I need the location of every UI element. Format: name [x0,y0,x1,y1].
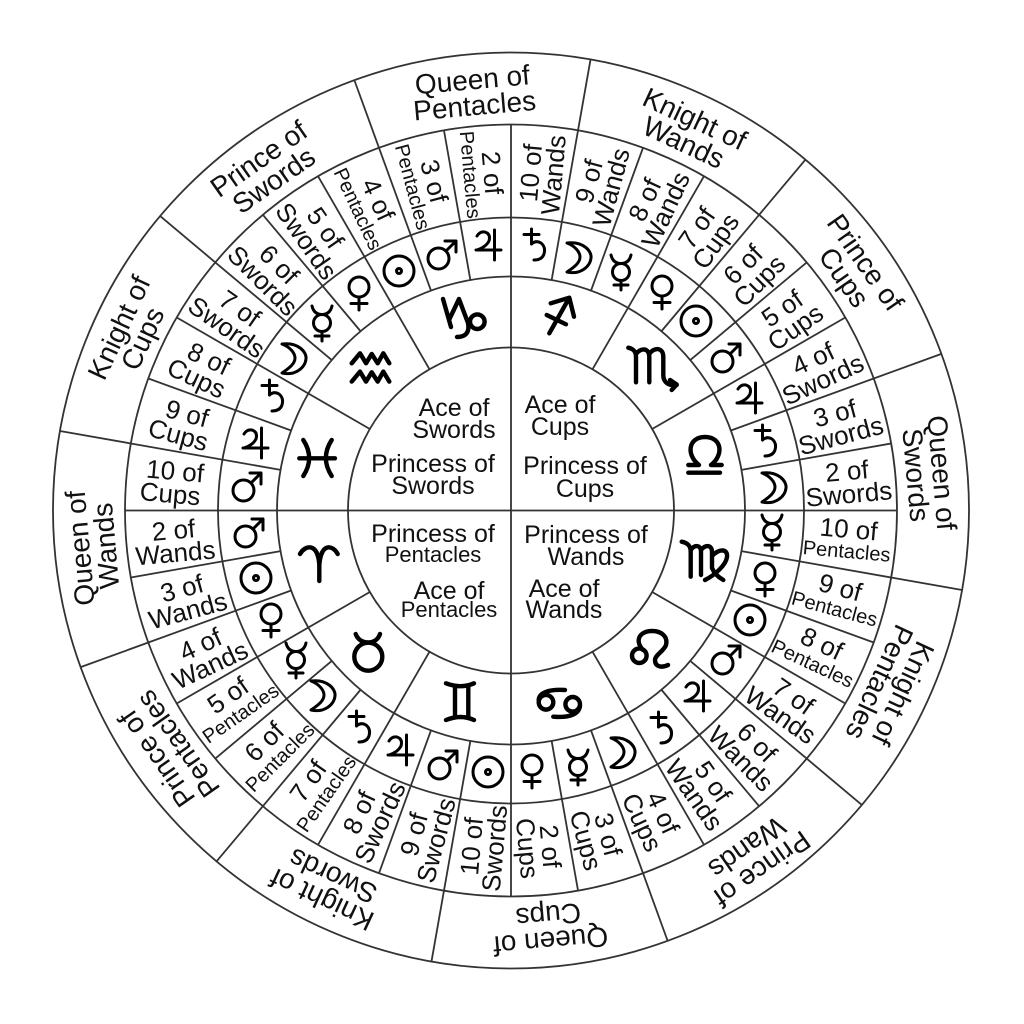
label: 10 of Cups: 10 of [145,454,206,489]
label: 7 of Wands: 7 of [767,671,821,721]
label: Ace of Pentacles: Pentacles [401,597,497,622]
label: 8 of Swords: Swords [348,777,412,868]
label: 7 of Wands: Wands [739,680,822,750]
label: 9 of Pentacles: Pentacles [789,588,880,632]
label: 6 of Swords: Swords [222,239,304,322]
center circle: aces and princesses [371,391,648,624]
label: Ace of Cups: Cups [531,413,589,441]
label: Prince of Wands: Wands [703,810,791,885]
label: Princess of Cups: Princess of [523,452,647,480]
label: Princess of Cups: Cups [556,475,614,503]
label: 3 of Cups: Cups [564,807,608,874]
label: 7 of Pentacles: 7 of [283,754,333,807]
label: 6 of Pentacles: Pentacles [242,719,319,797]
icon: Sagittarius [547,298,574,333]
icon: Saturn [524,229,545,260]
label: 4 of Swords: Swords [777,348,868,411]
icon: Venus [755,563,775,596]
label: Knight of Pentacles: Knight of [865,637,940,750]
icon: Moon [611,738,635,768]
icon: Sun [473,757,503,787]
label: 4 of Cups: 4 of [640,787,686,839]
label: 5 of Swords: 5 of [301,202,350,255]
label: Prince of Pentacles: Prince of [112,704,201,813]
label: 4 of Pentacles: Pentacles [329,165,386,254]
icon: Pisces [299,440,335,476]
label: 3 of Swords: Swords [795,410,887,461]
label: Prince of Cups: Cups [813,242,875,313]
icon: Mars [712,344,740,372]
label: 2 of Cups: 2 of [534,823,567,870]
icon: Sun [735,605,765,635]
icon: Sun [384,256,414,286]
label: 9 of Cups: 9 of [162,393,213,434]
icon: Moon [311,681,335,711]
label: Knight of Cups: Cups [115,303,170,375]
label: 4 of Pentacles: 4 of [355,174,401,226]
label: Knight of Swords: Swords [284,842,382,910]
label: 2 of Wands: Wands [134,534,217,571]
label: Princess of Pentacles: Pentacles [385,542,481,567]
label: 5 of Cups: Cups [762,298,829,357]
label: 5 of Pentacles: 5 of [201,670,255,720]
label: Queen of Wands: Queen of [60,489,101,607]
label: 2 of Swords: 2 of [824,454,871,488]
icon: Mars [233,473,261,501]
icon: Sun [681,306,711,336]
label: Knight of Wands: Wands [638,110,729,175]
icon: Mercury [568,750,588,785]
icon: Mercury [611,255,631,290]
label: 3 of Pentacles: 3 of [414,156,454,207]
label: 5 of Pentacles: Pentacles [199,680,283,748]
icon: Taurus [354,634,382,671]
label: 4 of Wands: Wands [168,635,253,696]
icon: Mars [235,519,263,547]
label: 6 of Cups: Cups [727,249,791,313]
label: 2 of Swords: Swords [804,475,893,513]
icon: Saturn [651,712,672,743]
icon: Leo [632,631,668,667]
label: Prince of Wands: Prince of [708,824,816,913]
label: Ace of Swords: Ace of [419,394,489,422]
label: 2 of Pentacles: 2 of [476,150,509,197]
planet ring: planetary symbols [233,229,786,788]
icon: Mars [429,751,457,779]
icon: Mercury [762,515,782,550]
label: Queen of Cups: Queen of [492,921,609,962]
label: 5 of Wands: 5 of [688,755,738,809]
label: 2 of Cups: Cups [510,817,545,880]
label: Knight of Pentacles: Pentacles [839,620,919,745]
label: 7 of Swords: 7 of [213,284,267,334]
label: 9 of Wands: 9 of [569,156,609,206]
icon: Mercury [312,306,332,341]
icon: Mars [428,241,456,269]
label: 10 of Wands: Wands [535,134,572,216]
icon: Moon [282,344,306,374]
label: Princess of Pentacles: Princess of [371,520,495,548]
icon: Cancer [539,690,580,717]
label: Queen of Swords: Swords [896,427,935,523]
label: Queen of Swords: Queen of [921,414,962,532]
label: 7 of Swords: Swords [183,290,271,364]
label: Ace of Wands: Wands [526,596,602,624]
icon: Venus [652,276,672,309]
label: 5 of Wands: Wands [659,753,729,836]
outer ring: court cards [60,59,962,962]
icon: Mars [712,646,740,674]
label: 7 of Cups: 7 of [672,201,722,254]
icon: Gemini [446,683,474,720]
label: 6 of Swords: 6 of [253,238,306,291]
label: 6 of Wands: 6 of [731,716,784,769]
label: 2 of Pentacles: Pentacles [455,130,484,220]
decan ring: minor arcana numbered cards [132,128,894,893]
label: 8 of Cups: Cups [163,352,230,405]
label: 3 of Wands: Wands [145,586,230,635]
icon: Libra [688,437,722,473]
label: Prince of Swords: Prince of [205,115,313,203]
label: 8 of Pentacles: Pentacles [768,636,857,693]
label: 3 of Swords: 3 of [810,393,860,433]
icon: Moon [762,473,786,503]
icon: Saturn [755,425,776,456]
label: Knight of Wands: Knight of [638,82,752,156]
label: 2 of Wands: 2 of [151,513,197,547]
label: Queen of Wands: Wands [87,502,125,590]
label: 9 of Swords: 9 of [394,809,434,859]
label: Queen of Pentacles: Queen of [414,59,531,100]
label: 10 of Cups: Cups [139,476,202,511]
icon: Venus [261,604,281,637]
label: Prince of Swords: Swords [227,141,321,220]
label: 8 of Pentacles: 8 of [796,621,849,666]
label: 8 of Cups: 8 of [183,336,236,382]
label: 10 of Wands: 10 of [513,142,548,203]
icon: Jupiter [737,383,762,413]
zodiac ring: zodiac signs [299,298,727,720]
label: 8 of Wands: Wands [635,167,696,252]
icon: Jupiter [685,681,710,711]
icon: Capricorn [443,299,485,337]
label: 6 of Pentacles: 6 of [238,715,291,768]
label: 8 of Wands: 8 of [622,173,668,226]
label: Ace of Pentacles: Ace of [414,577,484,605]
label: 5 of Cups: 5 of [756,283,809,333]
label: Princess of Wands: Wands [548,543,624,571]
icon: Aquarius [352,353,389,382]
label: 7 of Pentacles: Pentacles [293,752,361,837]
label: Princess of Swords: Swords [391,472,475,500]
label: 5 of Swords: Swords [269,197,344,285]
label: 6 of Cups: 6 of [717,238,769,290]
label: Knight of Cups: Knight of [82,271,157,384]
icon: Moon [567,243,591,273]
label: Ace of Wands: Ace of [529,575,599,603]
label: 10 of Pentacles: Pentacles [802,537,891,567]
label: 4 of Wands: 4 of [174,621,227,667]
icon: Jupiter [476,230,501,260]
icon: Saturn [349,711,370,742]
icon: Jupiter [388,735,413,765]
icon: Saturn [262,380,283,411]
label: 3 of Cups: 3 of [588,810,628,860]
icon: Jupiter [243,428,268,458]
label: 4 of Cups: Cups [616,788,668,856]
label: Queen of Cups: Cups [515,897,582,934]
label: 9 of Swords: Swords [410,795,462,886]
label: 4 of Swords: 4 of [787,336,840,381]
label: Queen of Pentacles: Pentacles [412,85,537,126]
label: Princess of Swords: Princess of [371,450,495,478]
label: 7 of Cups: Cups [686,208,745,275]
label: 9 of Wands: Wands [586,145,636,230]
label: 9 of Pentacles: 9 of [815,567,866,608]
label: 10 of Swords: Swords [476,804,513,893]
label: Ace of Swords: Swords [412,416,496,444]
icon: Virgo [682,542,727,580]
label: 10 of Swords: 10 of [454,815,489,876]
icon: Aries [300,547,338,581]
label: 8 of Swords: 8 of [336,786,382,839]
label: Prince of Pentacles: Pentacles [130,684,226,803]
label: 3 of Wands: 3 of [157,568,208,608]
icon: Mercury [286,643,306,678]
label: Ace of Cups: Ace of [525,391,595,419]
label: 9 of Cups: Cups [145,412,211,457]
icon: Scorpio [628,348,677,390]
icon: Sun [241,563,271,593]
label: Knight of Swords: Knight of [265,862,379,937]
label: 3 of Pentacles: Pentacles [390,142,434,232]
label: 10 of Pentacles: 10 of [819,512,880,547]
label: Prince of Cups: Prince of [821,208,910,317]
icon: Venus [522,755,542,788]
label: Princess of Wands: Princess of [524,521,648,549]
icon: Venus [349,277,369,310]
label: 6 of Wands: Wands [702,720,780,798]
